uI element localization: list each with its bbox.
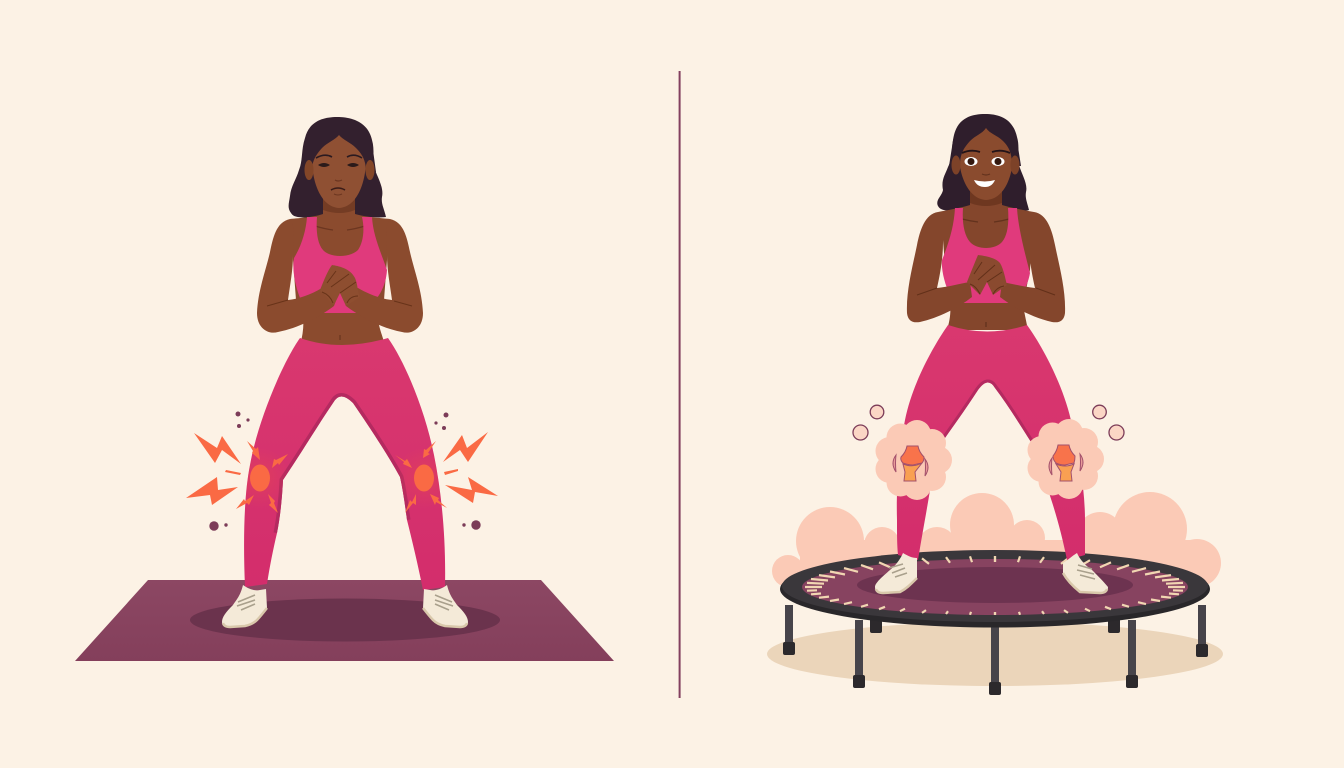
face [300, 118, 376, 213]
trampoline springs [805, 556, 1185, 615]
cloud halo [876, 420, 952, 500]
joint bones [893, 446, 928, 481]
panel: happy bounce on trampoline [767, 114, 1223, 695]
collarbones and navel [315, 226, 365, 340]
pain dots [209, 412, 481, 531]
trampoline frame [780, 550, 1210, 628]
left shoe [875, 553, 917, 593]
soft background clouds [772, 492, 1221, 587]
pain indicator: right knee [396, 441, 447, 513]
right shoe [423, 585, 468, 627]
lightning bolts: right side [443, 432, 498, 503]
hair [937, 114, 1029, 211]
collarbones and navel [962, 219, 1009, 327]
figure: happy woman [875, 114, 1108, 593]
inner thigh shading [940, 382, 1033, 445]
inner thigh shading [277, 396, 407, 533]
cloud halo [1028, 419, 1104, 499]
relief bubbles [853, 405, 1124, 440]
right arm [340, 219, 423, 333]
face [949, 115, 1021, 206]
right shoe [1063, 553, 1108, 593]
left arm [907, 212, 972, 322]
healthy joint: left knee [876, 420, 952, 500]
left arm [257, 219, 340, 333]
divider line [679, 71, 681, 698]
illustration canvas [75, 71, 1223, 698]
sports top [293, 217, 387, 313]
torso [290, 198, 390, 345]
joint bones [1049, 445, 1083, 481]
leggings [897, 325, 1085, 560]
healthy joint: right knee [1028, 419, 1104, 499]
pain indicator: left knee [236, 441, 288, 513]
right arm [1000, 212, 1065, 322]
figure: woman in pain [222, 117, 468, 627]
left shoe [222, 585, 267, 627]
lightning bolts: left side [186, 433, 241, 505]
trampoline back feet [870, 618, 1120, 633]
hair [289, 117, 386, 218]
sports top [942, 208, 1030, 303]
panel: painful squat on mat [75, 117, 614, 661]
trampoline mat [802, 559, 1188, 615]
trampoline legs [783, 605, 1208, 695]
torso [938, 188, 1034, 330]
clasped hands [320, 265, 360, 306]
exercise mat [75, 580, 614, 661]
clasped hands [967, 255, 1007, 295]
ground shadow [767, 622, 1223, 686]
leggings [244, 338, 445, 590]
